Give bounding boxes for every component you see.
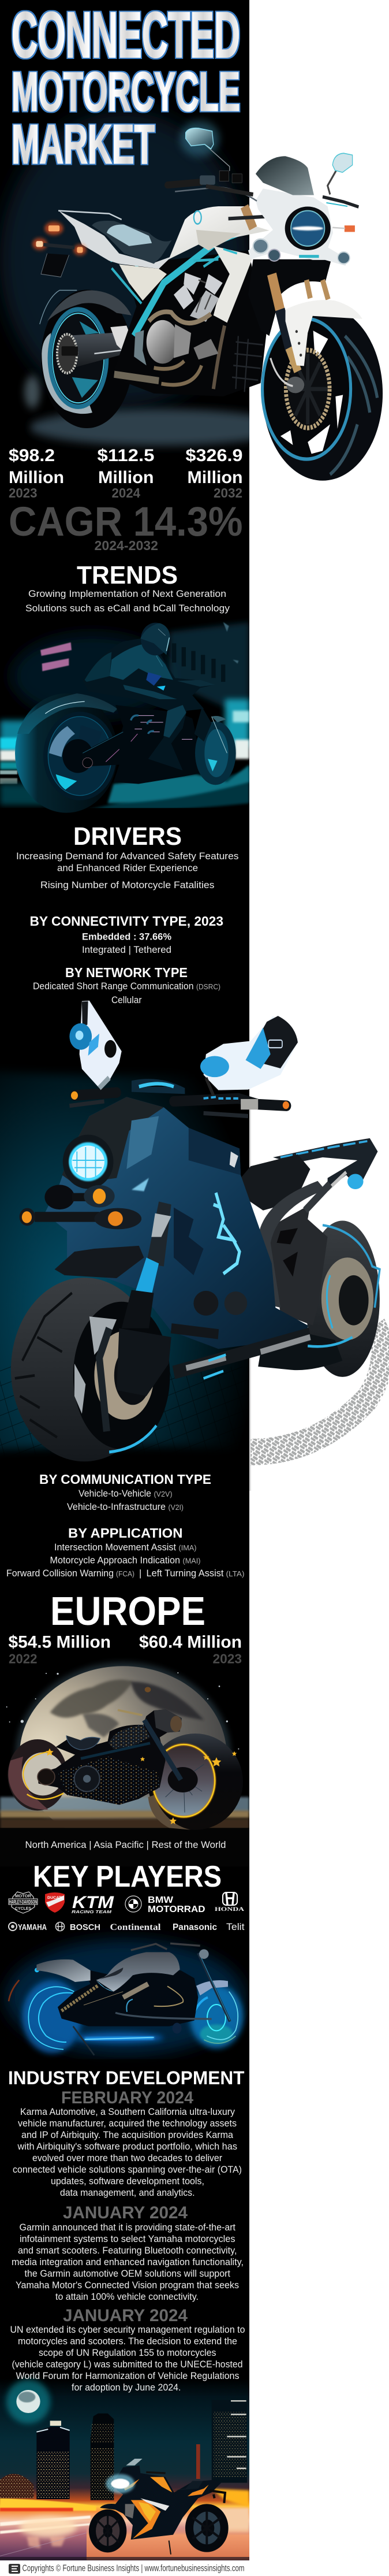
application values: (FCA)	[116, 1569, 134, 1578]
application values: Motorcycle Approach Indication	[50, 1556, 180, 1566]
neon front wheel	[192, 1992, 238, 2044]
development: January 2024 UN: World Forum for Harmonization of Vehicle Regulations	[16, 2371, 239, 2381]
development: February 2024: updates, software development tools,	[51, 2176, 204, 2187]
network type values: Cellular	[111, 995, 142, 1005]
development: January 2024 UN: JANUARY 2024	[63, 2306, 188, 2325]
development: February 2024: connected vehicle solutions spanning over-the-air (OTA)	[13, 2165, 242, 2175]
logo: Harley-Davidson	[9, 1892, 38, 1913]
communication type values: (V2I)	[169, 1503, 184, 1512]
logo: Bosch	[55, 1922, 100, 1932]
hero bike front end	[32, 128, 383, 481]
development: January 2024 Garmin: the Garmin automotive OEM solutions will support	[24, 2269, 230, 2279]
logo: KTM: KTM	[72, 1893, 114, 1912]
footer logo	[9, 2564, 20, 2574]
development: January 2024 UN: UN extended its cyber security management regulation to	[10, 2325, 245, 2335]
hero backdrop glow	[0, 112, 288, 446]
communication type heading: BY COMMUNICATION TYPE	[39, 1472, 211, 1487]
logo: Yamaha	[9, 1922, 47, 1932]
network type heading: BY NETWORK TYPE	[65, 965, 188, 980]
communication type values: Vehicle-to-Infrastructure	[67, 1502, 166, 1512]
development: February 2024: evolved over more than two decades to deliver	[32, 2153, 222, 2163]
logo: Honda	[215, 1892, 245, 1912]
development: February 2024	[13, 2088, 242, 2198]
application values: Intersection Movement Assist	[54, 1542, 176, 1553]
CAGR: CAGR 14.3%	[9, 499, 242, 545]
neon bike body	[36, 1943, 230, 2055]
blue motorcycle drawing	[11, 1001, 380, 1461]
development: February 2024: and IP of Airbiquity. The acquisition provides Karma	[21, 2130, 234, 2140]
hero motorcycle drawing	[40, 206, 270, 428]
development: January 2024 UN: for adoption by June 2024.	[72, 2382, 181, 2393]
title: MARKET	[12, 113, 155, 176]
application values: (IMA)	[179, 1543, 196, 1552]
logo: Harley-Davidson: CYCLES	[15, 1907, 31, 1911]
stat: 2032: $326.9	[186, 446, 242, 465]
logo: BMW Motorrad	[125, 1895, 205, 1914]
drivers heading: DRIVERS	[73, 822, 182, 851]
panel: blue motorcycle illustration	[0, 1001, 382, 1491]
panel: hero motorcycle	[0, 112, 383, 481]
Europe stats: $60.4 Million	[139, 1633, 242, 1651]
communication type values: (V2V)	[154, 1490, 172, 1498]
development: January 2024 Garmin: media integration and enhanced navigation functionality,	[12, 2257, 244, 2267]
logo: Harley-Davidson: HARLEY-DAVIDSON	[9, 1899, 37, 1905]
logo: Ducati: DUCATI	[47, 1896, 62, 1900]
stat: 2023: Million	[9, 468, 64, 487]
stat: 2024	[97, 446, 155, 500]
development: February 2024: data management, and analytics.	[60, 2188, 195, 2198]
front fork and wheel	[11, 1201, 171, 1461]
drivers text	[16, 851, 239, 890]
stat: 2032	[186, 446, 242, 500]
panel: neon motorcycle illustration	[0, 1940, 249, 2073]
logo: Honda: HONDA	[215, 1906, 245, 1912]
development: January 2024 Garmin: Garmin announced that it is providing state-of-the-art	[20, 2222, 235, 2233]
industry development heading: INDUSTRY DEVELOPMENT	[8, 2068, 245, 2088]
application values: Forward Collision Warning	[6, 1568, 114, 1579]
footer copyright: Copyrights © Fortune Business Insights | www.fortunebusinessinsights.com	[22, 2563, 245, 2574]
stat: 2032: 2032	[214, 485, 242, 500]
trends text: Solutions such as eCall and bCall Technology	[25, 603, 230, 614]
white edge sliver	[249, 1098, 251, 1491]
moon bike body	[38, 1709, 182, 1805]
skyline buildings	[0, 2400, 247, 2500]
Europe stats	[8, 1633, 242, 1666]
stat: 2024: Million	[98, 468, 154, 487]
stat: 2023: 2023	[9, 485, 37, 500]
stat: 2023: $98.2	[9, 446, 55, 465]
development: January 2024 Garmin: infotainment systems to select Yamaha motorcycles	[20, 2234, 235, 2244]
development: January 2024 Garmin: Yamaha Motor's Connected Vision program that seeks	[16, 2280, 239, 2291]
development: January 2024 Garmin	[12, 2203, 244, 2302]
drivers text: and Enhanced Rider Experience	[57, 863, 198, 874]
moon bike front wheel	[148, 1734, 243, 1830]
logo: Bosch: BOSCH	[70, 1922, 100, 1932]
logo: BMW Motorrad: MOTORRAD	[148, 1905, 205, 1914]
panel: moon motorcycle illustration	[0, 1660, 249, 1830]
rider bike frame	[91, 705, 200, 784]
stat: 2023	[9, 446, 64, 500]
logo: Harley-Davidson: MOTOR	[15, 1894, 31, 1899]
regions: North America | Asia Pacific | Rest of the World	[25, 1840, 226, 1850]
application values	[6, 1542, 245, 1579]
key players heading: KEY PLAYERS	[33, 1860, 222, 1894]
logo: KTM: RACING TEAM	[72, 1910, 111, 1914]
development: January 2024 UN: motorcycles and scooters. The decision to extend the	[18, 2336, 237, 2347]
logo: Telit: Telit	[226, 1922, 245, 1932]
application values: (LTA)	[226, 1569, 245, 1578]
Europe stats: 2022	[9, 1651, 37, 1666]
development: January 2024 Garmin: to attain 100% vehicle connectivity.	[55, 2292, 199, 2302]
teal backdrop	[0, 1040, 323, 1482]
panel: city motorcycle illustration	[0, 2379, 249, 2561]
network type values: Dedicated Short Range Communication	[33, 981, 194, 992]
development: February 2024: Karma Automotive, a Southern California ultra-luxury	[20, 2107, 235, 2117]
logo: Panasonic: Panasonic	[173, 1922, 217, 1932]
stat: 2024: $112.5	[97, 446, 155, 465]
network type values: (DSRC)	[196, 982, 220, 991]
connectivity values	[82, 931, 171, 955]
application values: Left Turning Assist	[147, 1568, 224, 1579]
logo: BMW Motorrad: BMW	[148, 1895, 174, 1905]
development: February 2024: with Airbiquity's software product portfolio, which has	[17, 2141, 237, 2152]
trends heading: TRENDS	[77, 561, 178, 589]
sport motorcycle	[89, 2459, 229, 2555]
network type values	[33, 981, 220, 1005]
development: January 2024 UN: (vehicle category L) was submitted to the UNECE-hosted	[12, 2359, 242, 2370]
Europe stats: $54.5 Million	[8, 1633, 111, 1651]
CAGR: 2024-2032	[95, 538, 158, 553]
application heading: BY APPLICATION	[68, 1525, 182, 1541]
footer	[0, 2560, 389, 2576]
black column background	[0, 0, 249, 2560]
connectivity type heading: BY CONNECTIVITY TYPE, 2023	[30, 914, 223, 929]
development: February 2024: vehicle manufacturer, acquired the technology assets	[18, 2118, 237, 2129]
trends text	[25, 589, 230, 614]
logo: Yamaha: YAMAHA	[18, 1922, 47, 1932]
tyre track on white	[250, 1326, 382, 1452]
communication type values	[67, 1489, 184, 1512]
development: January 2024 Garmin: JANUARY 2024	[63, 2203, 188, 2222]
stat: 2024: 2024	[112, 485, 140, 500]
communication type values: Vehicle-to-Vehicle	[78, 1489, 151, 1499]
rear wheel of rider bike	[15, 693, 118, 813]
drivers text: Rising Number of Motorcycle Fatalities	[40, 880, 215, 890]
application values: (MAI)	[182, 1557, 201, 1565]
application values: |	[139, 1568, 141, 1579]
stat: 2032: Million	[187, 468, 242, 487]
development: January 2024 UN: scope of UN Regulation 155 to motorcycles	[39, 2348, 216, 2358]
neon rear wheel	[9, 1968, 74, 2050]
connectivity values: Integrated | Tethered	[82, 945, 171, 955]
moon bike rear wheel	[8, 1739, 68, 1810]
connectivity values: Embedded : 37.66%	[82, 931, 171, 942]
title	[12, 0, 240, 176]
panel: key player logos	[9, 1892, 245, 1932]
logo: Continental: Continental	[110, 1922, 161, 1932]
market size stats	[9, 446, 242, 500]
development: January 2024 Garmin: and smart scooters. Featuring Bluetooth connectivity,	[18, 2245, 237, 2256]
drivers text: Increasing Demand for Advanced Safety Features	[16, 851, 239, 862]
rider	[83, 623, 215, 770]
trends text: Growing Implementation of Next Generation	[28, 589, 226, 599]
logo: Ducati	[45, 1892, 65, 1913]
development: February 2024: FEBRUARY 2024	[61, 2088, 193, 2107]
development: January 2024 UN	[10, 2306, 245, 2393]
panel: rider on motorcycle illustration	[0, 622, 249, 826]
Europe heading: EUROPE	[50, 1588, 205, 1634]
Europe stats: 2023	[212, 1651, 242, 1666]
